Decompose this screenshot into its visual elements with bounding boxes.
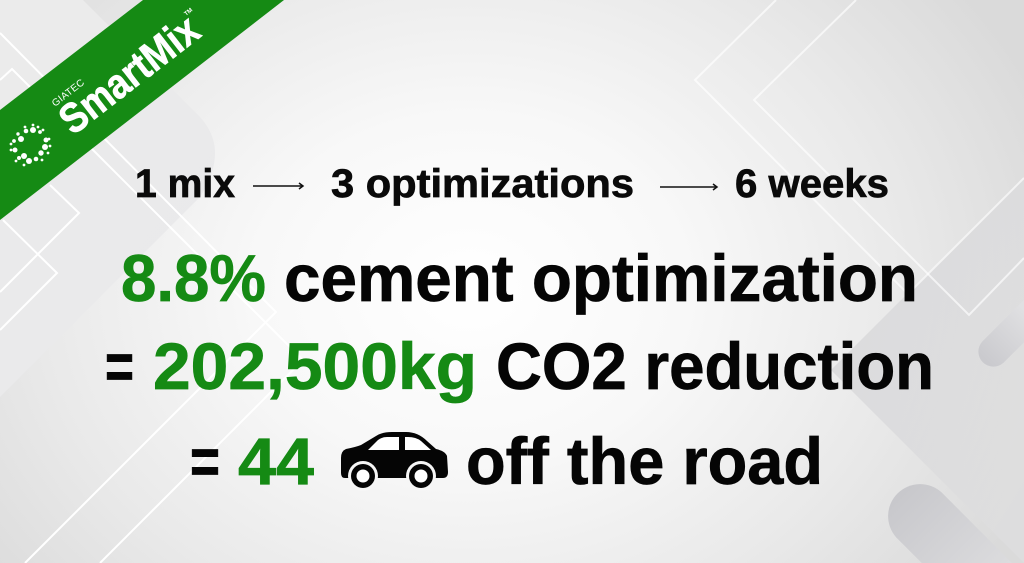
green corner banner [0,0,284,220]
headline: CO2 reduction: CO2 reduction [496,329,934,403]
background pill: right [978,300,1024,367]
icon: car [341,432,448,491]
headline: cars off the road: = [190,424,220,498]
headline: CO2 reduction [105,329,934,403]
logo wordmark: GIATEC: GIATEC [50,77,87,109]
step: 3 optimizations: 3 optimizations [331,162,634,206]
headline: cars off the road: 44 [238,424,314,498]
headline: cars off the road: off the road [466,424,823,498]
process line [135,162,889,206]
headline: cars off the road [190,424,823,498]
background pill: bottom right [888,484,1012,563]
headline: CO2 reduction: = [105,329,134,403]
step: 1 mix: 1 mix [135,162,235,206]
arrow [660,184,717,190]
trademark mark: TM [184,8,194,18]
step: 6 weeks: 6 weeks [735,162,889,206]
headline: CO2 reduction: 202,500kg [153,329,477,403]
arrow [253,183,303,189]
headline: cement optimization: 8.8% [121,241,266,315]
logo icon: dotted ring [10,124,51,166]
headline: cement optimization: cement optimization [284,241,918,315]
background panel: right [831,177,1024,563]
background panel: left [0,0,215,397]
